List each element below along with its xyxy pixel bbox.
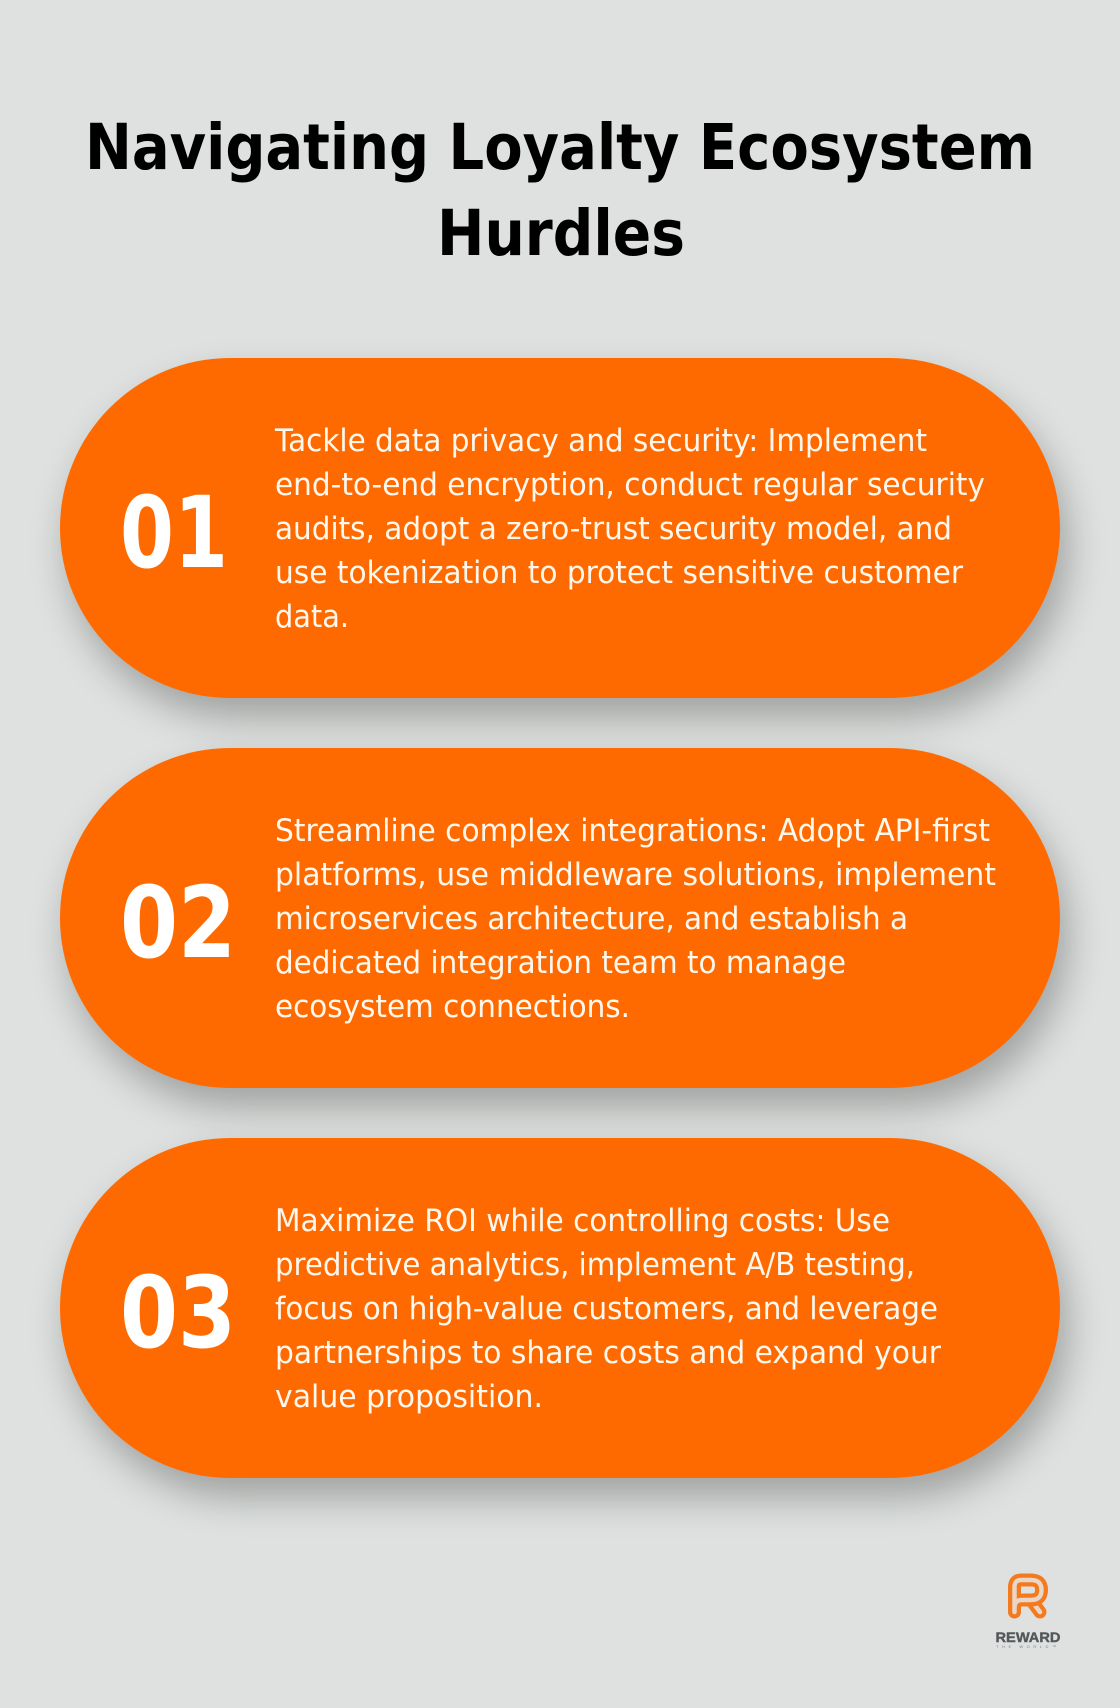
step 03 text: value proposition. (275, 1379, 543, 1415)
panel: step 01 background (60, 358, 1060, 698)
step 03 text: Maximize ROI while controlling costs: Use (275, 1203, 890, 1239)
step 03 text: focus on high-value customers, and leverage (275, 1291, 938, 1327)
step 03 text (275, 1203, 941, 1415)
step 01 text (274, 423, 985, 635)
step 02 number: 02 (120, 866, 236, 981)
step 03 text: predictive analytics, implement A/B testing, (275, 1247, 915, 1283)
step 02 text: ecosystem connections. (275, 989, 630, 1025)
title (85, 111, 1035, 270)
step 03 text: partnerships to share costs and expand your (275, 1335, 941, 1371)
step 02 text: platforms, use middleware solutions, implement (275, 857, 996, 893)
step 01 text: audits, adopt a zero-trust security model, and (275, 511, 952, 547)
step 02 text (275, 813, 996, 1025)
panel: step 03 background (60, 1138, 1060, 1478)
step 01 text: end-to-end encryption, conduct regular security (275, 467, 985, 503)
title: Hurdles (437, 197, 685, 270)
step 01 text: data. (275, 599, 349, 635)
logo: Reward the World (996, 1580, 1060, 1649)
step 01 text: Tackle data privacy and security: Implement (274, 423, 927, 459)
step 02 text: Streamline complex integrations: Adopt API-first (275, 813, 990, 849)
step 02 text: dedicated integration team to manage (275, 945, 846, 981)
icon: stylised R (1014, 1580, 1042, 1612)
logo tagline: THE WORLD™ (996, 1644, 1056, 1649)
panel: step 02 background (60, 748, 1060, 1088)
step 01 number: 01 (120, 476, 228, 591)
step 02 text: microservices architecture, and establish a (275, 901, 908, 937)
step 03 number: 03 (120, 1256, 236, 1371)
step 01 text: use tokenization to protect sensitive customer (275, 555, 963, 591)
logo wordmark: REWARD (996, 1629, 1060, 1645)
